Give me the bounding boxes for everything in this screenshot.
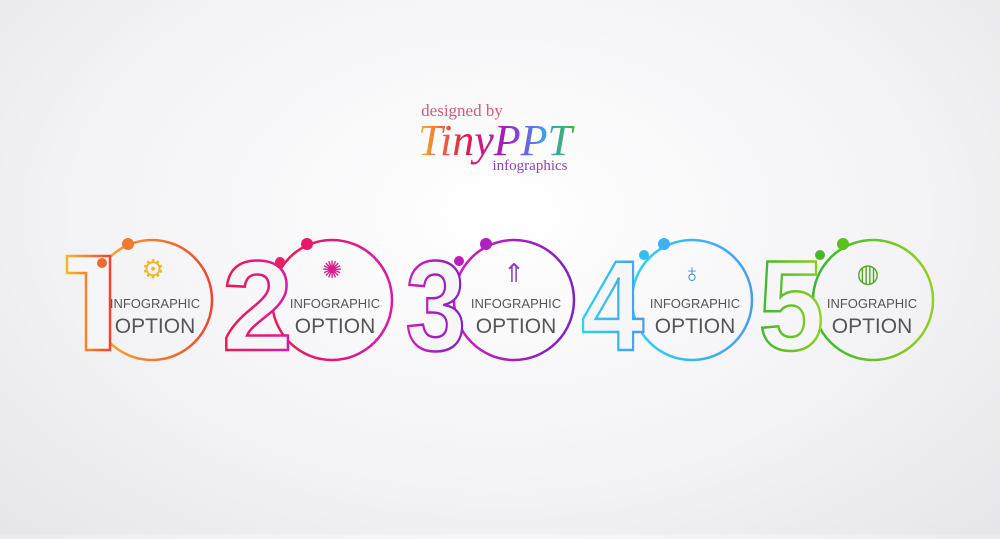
step 5: 5 bbox=[759, 236, 824, 378]
step 4: 4 bbox=[581, 234, 644, 378]
step 5: INFOGRAPHIC bbox=[827, 296, 917, 311]
step 2: OPTION bbox=[295, 315, 375, 338]
step 4 bbox=[581, 234, 752, 378]
step 1: OPTION bbox=[115, 315, 195, 338]
step 3: 3 bbox=[405, 235, 466, 378]
step 4: ♁ bbox=[682, 258, 702, 288]
step 3: ⇑ bbox=[503, 258, 525, 288]
logo: designed by bbox=[421, 101, 503, 120]
step 2: INFOGRAPHIC bbox=[290, 296, 380, 311]
step 1: ⚙ bbox=[141, 254, 165, 284]
logo bbox=[418, 101, 576, 174]
step 4: INFOGRAPHIC bbox=[650, 296, 740, 311]
logo: infographics bbox=[493, 158, 568, 174]
step 4: OPTION bbox=[655, 315, 735, 338]
step 5: OPTION bbox=[832, 315, 912, 338]
step 3: INFOGRAPHIC bbox=[471, 296, 561, 311]
step 2 bbox=[222, 235, 392, 378]
step 1 bbox=[67, 238, 212, 360]
logo: TinyPPT bbox=[418, 116, 576, 165]
step 5: ◍ bbox=[857, 258, 879, 288]
step 3: OPTION bbox=[476, 315, 556, 338]
step 2: 2 bbox=[222, 235, 293, 378]
step 1: INFOGRAPHIC bbox=[110, 296, 200, 311]
step 2: ✺ bbox=[322, 257, 342, 284]
step 3 bbox=[405, 235, 574, 378]
step 5 bbox=[759, 236, 933, 378]
